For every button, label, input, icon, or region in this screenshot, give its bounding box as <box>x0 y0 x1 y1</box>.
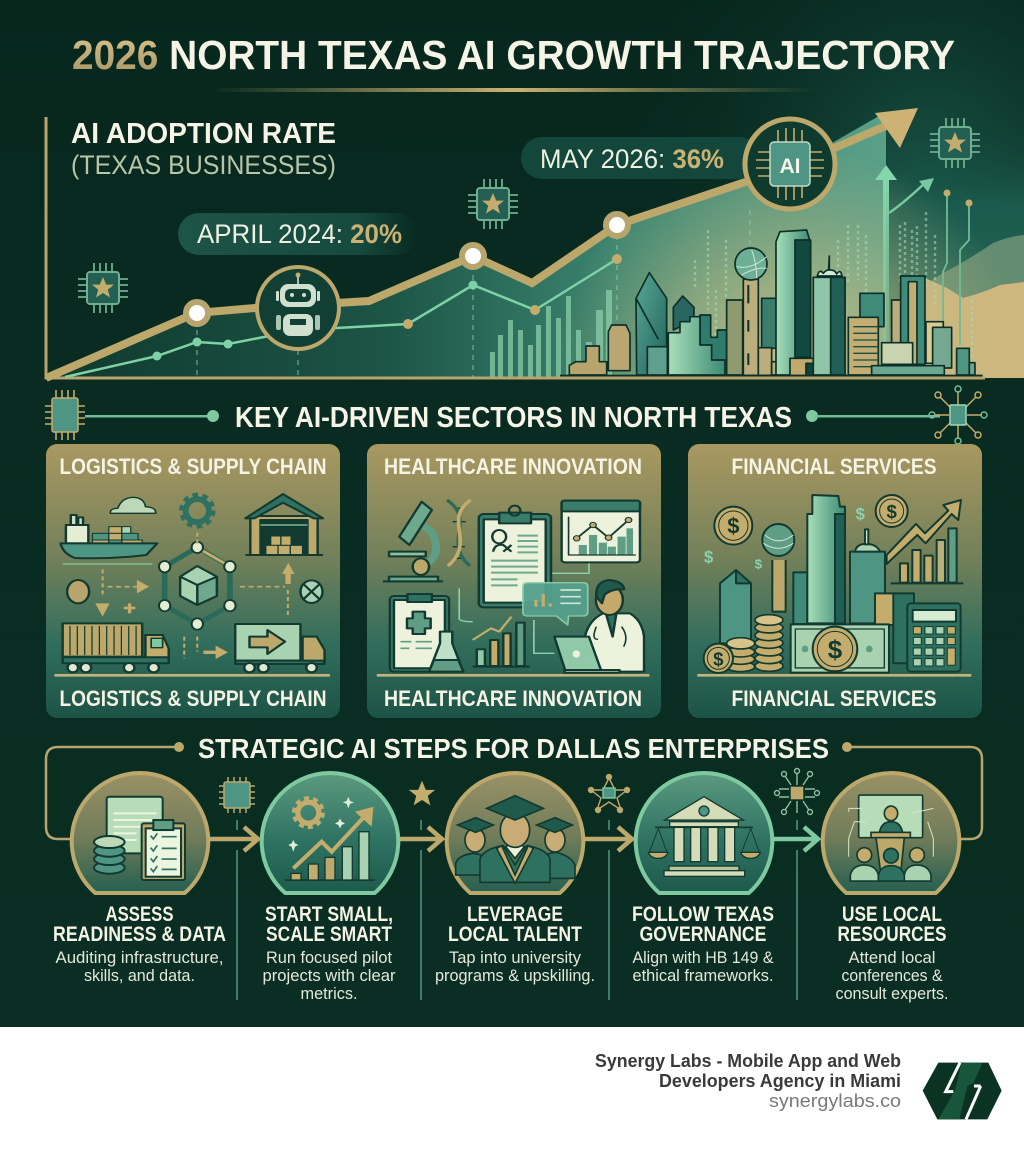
healthcare illustration <box>377 500 649 677</box>
step description <box>262 948 396 1003</box>
step description: Tap into university <box>449 948 581 967</box>
icon: container truck <box>63 623 169 672</box>
connector right <box>806 410 940 422</box>
icon: coin foreground: $ <box>713 648 724 669</box>
icon: banknote <box>791 624 889 673</box>
icon: circuit <box>929 386 987 444</box>
shelf line <box>697 674 971 677</box>
step title <box>838 903 946 946</box>
icon: crossed circle <box>301 580 323 603</box>
panel background <box>688 444 982 718</box>
step 4: follow governance <box>632 773 774 985</box>
step title: FOLLOW TEXAS <box>632 903 774 926</box>
icon: domed building <box>850 529 885 623</box>
icon: calculator <box>907 603 961 672</box>
chart background hills <box>925 235 1024 378</box>
icon: star chip right <box>930 118 980 168</box>
step 1: assess readiness <box>53 773 226 985</box>
step title: ASSESS <box>106 903 174 926</box>
step description: conferences & <box>842 966 943 985</box>
icon: gear and growth chart <box>285 797 375 880</box>
chart right sky <box>886 110 1024 378</box>
panel top label: LOGISTICS & SUPPLY CHAIN <box>60 454 326 479</box>
icon: documents and database <box>94 797 185 880</box>
heading: strategic steps: STRATEGIC AI STEPS FOR DALLAS ENTERPRISES <box>198 733 829 764</box>
panel background <box>46 444 340 718</box>
section header: key sectors <box>45 386 987 444</box>
step title: READINESS & DATA <box>53 923 226 946</box>
icon: main tower <box>807 495 845 623</box>
icon: gold coin with dollar <box>714 507 752 545</box>
icon: gold coin with dollar: $ <box>727 514 739 539</box>
icon: medical record <box>479 506 551 607</box>
golden glow behind skyline <box>530 112 1024 378</box>
step title <box>448 903 582 946</box>
connector traces <box>459 563 589 653</box>
step description <box>632 948 774 985</box>
skyline <box>560 230 983 376</box>
icon: gold coin with dollar small <box>876 495 908 527</box>
panel bottom label: FINANCIAL SERVICES <box>732 686 936 711</box>
chart: AI adoption rate <box>46 108 1024 378</box>
logistics illustration <box>54 494 330 677</box>
dollar marks <box>704 504 866 571</box>
icon: DNA <box>447 500 471 566</box>
column separators <box>237 820 797 1000</box>
baseline axis <box>46 117 985 378</box>
footer company name <box>595 1051 901 1091</box>
icon: flask <box>429 632 463 672</box>
icon: low buildings <box>875 593 914 663</box>
dollar marks: $ <box>856 504 866 523</box>
icon: robot medallion <box>257 267 339 349</box>
icon: chart window <box>562 501 640 562</box>
step description: Align with HB 149 & <box>632 948 774 967</box>
icon: AI chip medallion <box>745 119 835 209</box>
footer website: synergylabs.co <box>769 1091 901 1111</box>
step title: SCALE SMART <box>266 923 392 946</box>
step title: RESOURCES <box>838 923 946 946</box>
gold growth line and arrow <box>46 108 918 378</box>
panel: healthcare <box>367 444 661 718</box>
step 2: start small <box>262 773 398 1003</box>
heading: key sectors: KEY AI-DRIVEN SECTORS IN NORTH TEXAS <box>235 402 792 434</box>
section header: strategic steps <box>46 733 982 839</box>
step badge <box>447 773 583 893</box>
panel background <box>367 444 661 718</box>
digital rain <box>695 212 972 360</box>
step description: consult experts. <box>836 984 948 1003</box>
panel top label: FINANCIAL SERVICES <box>732 454 936 479</box>
footer logo <box>923 1063 1002 1119</box>
icon: courthouse and scales <box>648 797 760 876</box>
icon: chip connector <box>219 777 255 813</box>
step description: programs & upskilling. <box>435 966 595 985</box>
step badge <box>72 773 208 893</box>
footer background <box>0 1027 1024 1154</box>
step title: USE LOCAL <box>842 903 942 926</box>
icon: star network connector <box>588 774 630 812</box>
step badge <box>823 773 959 893</box>
step 3: leverage talent <box>435 773 595 985</box>
icon: coin stack short <box>727 638 755 672</box>
icon: chat bubble <box>523 583 588 625</box>
step title: GOVERNANCE <box>640 923 766 946</box>
step description: Attend local <box>848 948 936 967</box>
dollar marks: $ <box>755 556 763 571</box>
icon: rising bars and arrow <box>887 500 963 583</box>
step title: START SMALL, <box>265 903 393 926</box>
rising green arrow <box>875 165 934 375</box>
icon: side tower <box>793 572 807 624</box>
step description <box>435 948 595 985</box>
icon: AI chip medallion: AI <box>780 155 800 178</box>
icon: star connector <box>409 781 435 805</box>
icon: star chip left <box>78 263 128 313</box>
step description: projects with clear <box>262 966 396 985</box>
step title <box>53 903 226 946</box>
icon: coin foreground <box>704 644 733 673</box>
chart area under growth line <box>46 112 886 378</box>
connector left <box>85 410 219 422</box>
hub ring with cube <box>159 542 236 630</box>
icon: gear <box>181 495 213 526</box>
pill: May 2026 <box>521 137 761 179</box>
icon: gold coin with dollar small: $ <box>886 501 897 522</box>
step description <box>836 948 948 1003</box>
icon: left tower <box>720 570 751 643</box>
icon: prescription clipboard <box>390 594 449 672</box>
icon: dotted circle <box>67 580 89 603</box>
icon: chip <box>45 390 85 440</box>
icon: cloud <box>110 497 156 513</box>
panel bottom label: HEALTHCARE INNOVATION <box>384 686 642 711</box>
panel: financial <box>688 444 982 718</box>
shelf line <box>377 674 649 677</box>
step title <box>265 903 393 946</box>
green trend line <box>65 254 622 377</box>
step 5: use local resources <box>823 773 959 1003</box>
pill: May 2026: MAY 2026: 36% <box>540 144 724 174</box>
heading: AI adoption rate: AI ADOPTION RATE <box>71 118 336 150</box>
icon: coin stack tall <box>755 615 783 671</box>
icon: microscope <box>383 502 443 581</box>
footer company name: Developers Agency in Miami <box>659 1071 901 1091</box>
panel bottom label: LOGISTICS & SUPPLY CHAIN <box>60 686 326 711</box>
shelf line <box>54 674 330 677</box>
step description <box>56 948 224 985</box>
dashed drop lines <box>197 210 750 378</box>
step badge <box>262 773 398 893</box>
panel: logistics <box>46 444 340 718</box>
icon: circuit connector <box>774 768 820 814</box>
pill: April 2024: APRIL 2024: 20% <box>197 219 402 249</box>
subheading: Texas businesses: (TEXAS BUSINESSES) <box>71 150 336 180</box>
step description: ethical frameworks. <box>632 966 774 985</box>
loop connector left <box>46 742 184 839</box>
dollar marks: $ <box>704 548 714 567</box>
icon: mini bar chart <box>473 617 530 667</box>
step title <box>632 903 774 946</box>
title underline <box>210 88 815 92</box>
circuit traces <box>943 190 972 345</box>
step description: Run focused pilot <box>266 948 392 967</box>
icon: laptop <box>554 637 620 673</box>
icon: conference speaker <box>849 795 933 881</box>
step description: Auditing infrastructure, <box>56 948 224 967</box>
panel top label: HEALTHCARE INNOVATION <box>384 454 642 479</box>
step title: LEVERAGE <box>467 903 563 926</box>
icon: doctor <box>585 580 644 672</box>
step description: metrics. <box>300 984 358 1003</box>
footer company name: Synergy Labs - Mobile App and Web <box>595 1051 901 1071</box>
icon: graduates <box>456 796 575 883</box>
icon: reunion tower <box>762 524 794 612</box>
footer <box>0 1027 1024 1154</box>
data point markers <box>186 214 628 324</box>
step badge <box>636 773 772 893</box>
loop connector right <box>842 742 982 839</box>
title: 2026 NORTH TEXAS AI GROWTH TRAJECTORY <box>72 32 955 78</box>
icon: warehouse <box>245 494 323 555</box>
pill: April 2024 <box>178 213 418 255</box>
step title: LOCAL TALENT <box>448 923 582 946</box>
step arrows <box>209 827 818 851</box>
financial illustration <box>697 495 971 677</box>
icon: delivery truck <box>235 624 325 672</box>
route arrows <box>103 533 288 658</box>
icon: banknote: $ <box>828 634 843 664</box>
icon: star chip centre <box>468 179 518 229</box>
background glow <box>0 0 1024 378</box>
step description: skills, and data. <box>84 966 195 985</box>
chart bars <box>490 290 612 378</box>
icon: ship <box>61 515 157 564</box>
